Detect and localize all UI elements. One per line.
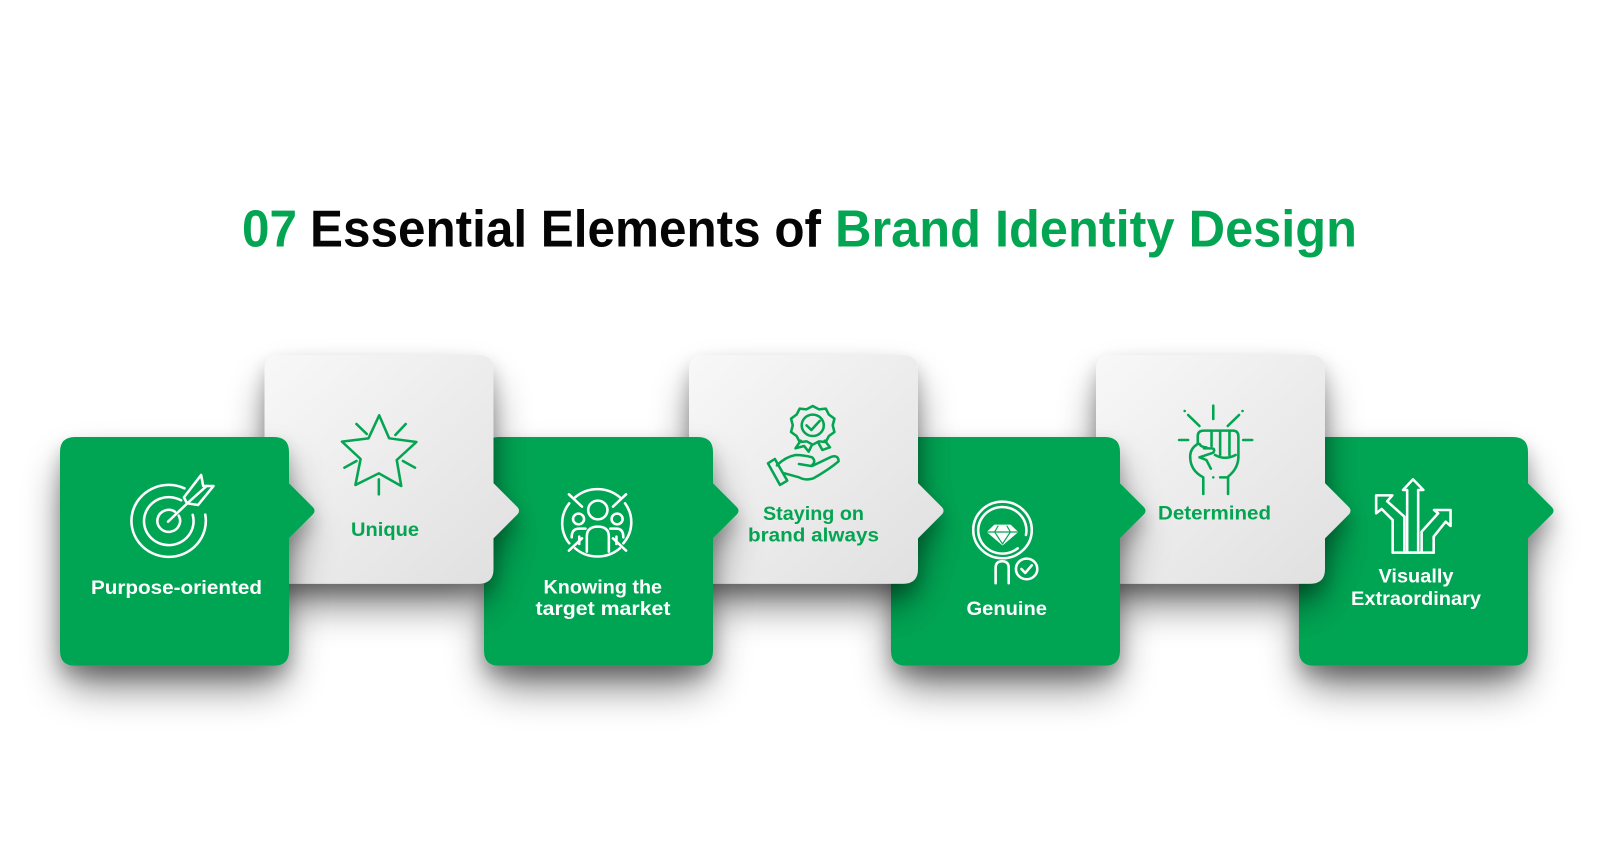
label: target market <box>536 599 671 620</box>
label: Genuine <box>966 599 1047 620</box>
icon: raised fist <box>1179 406 1252 494</box>
label: brand always <box>748 526 879 547</box>
title: 07 <box>242 200 297 258</box>
title <box>242 200 1357 258</box>
label: Extraordinary <box>1351 589 1481 610</box>
icon: shining star <box>342 415 416 494</box>
card 7: Visually Extraordinary <box>1299 437 1554 666</box>
icon: target audience group <box>562 489 631 557</box>
card 4: Staying on brand always <box>689 355 944 584</box>
icon: target with arrow <box>131 475 214 557</box>
label <box>536 577 671 620</box>
icon: magnifier with diamond <box>973 502 1037 583</box>
card 1: Purpose-oriented <box>60 437 314 666</box>
title: Brand Identity Design <box>835 200 1357 258</box>
icon: branching arrows <box>1376 479 1451 553</box>
label <box>748 504 879 547</box>
label: Visually <box>1378 566 1454 587</box>
icon: hand holding award <box>768 406 839 485</box>
card 3: Knowing the target market <box>484 437 738 666</box>
label <box>1351 566 1481 610</box>
card 5: Genuine <box>891 437 1146 666</box>
label: Unique <box>351 520 419 541</box>
card 2: Unique <box>264 355 519 584</box>
title: Essential Elements of <box>310 200 822 258</box>
card 6: Determined <box>1096 355 1350 584</box>
label: Knowing the <box>544 577 662 598</box>
label: Purpose-oriented <box>91 578 262 599</box>
label: Staying on <box>763 504 864 525</box>
label: Determined <box>1158 503 1271 524</box>
